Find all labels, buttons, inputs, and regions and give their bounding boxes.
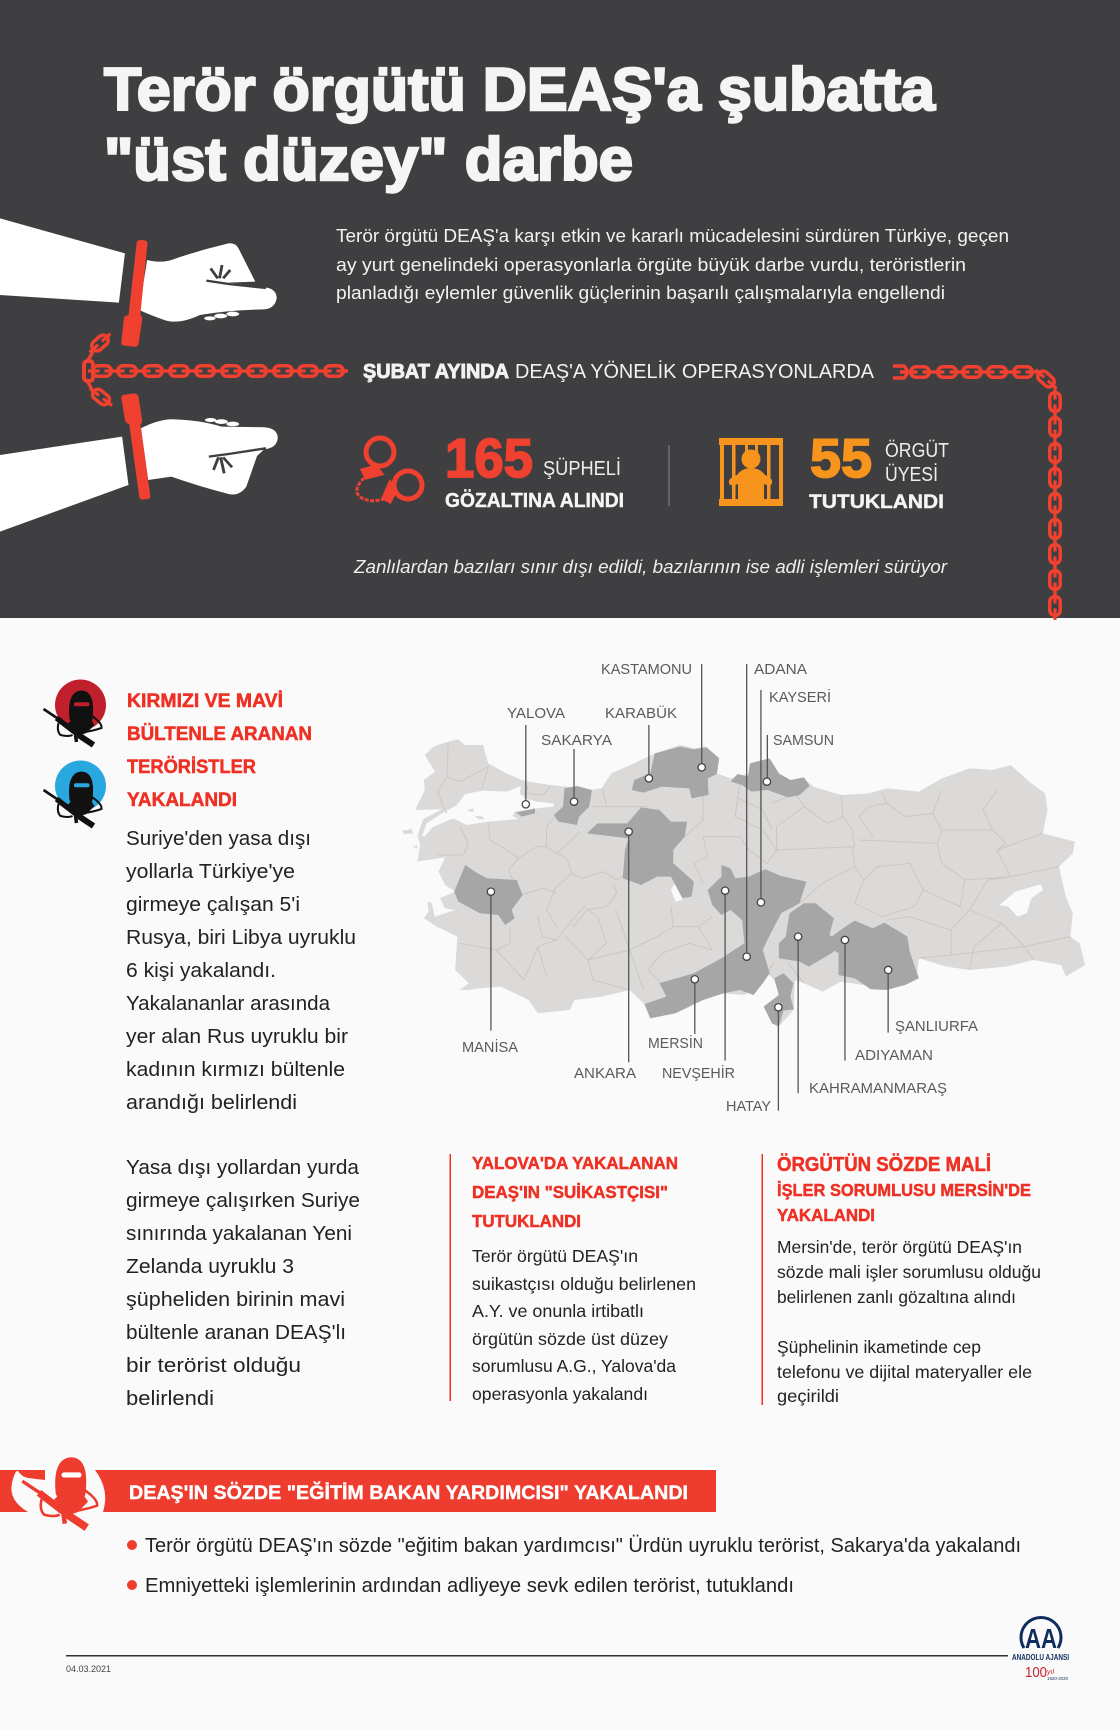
islands bbox=[402, 809, 484, 991]
map labels: SAMSUN bbox=[773, 732, 834, 749]
heading: red and blue notices bbox=[127, 691, 312, 811]
country base bbox=[415, 739, 1085, 1027]
banner bbox=[0, 1470, 716, 1512]
text block: Russian and Libyan suspects: 6 kişi yakalandı. bbox=[126, 960, 276, 982]
text block: Russian and Libyan suspects: yollarla Türkiye'ye bbox=[126, 861, 295, 883]
intro text: Terör örgütü DEAŞ'a karşı etkin ve kararlı mücadelesini sürdüren Türkiye, geçen bbox=[336, 225, 1009, 246]
map labels bbox=[462, 661, 978, 1115]
map labels: ŞANLIURFA bbox=[895, 1018, 978, 1035]
leader lines bbox=[491, 664, 888, 1111]
heading: red and blue notices: YAKALANDI bbox=[127, 790, 237, 811]
bullet list bbox=[127, 1535, 1021, 1597]
intro text bbox=[336, 225, 1009, 303]
text block: New Zealand suspects: bültenle aranan DEAŞ'lı bbox=[126, 1322, 346, 1344]
bullet one: Terör örgütü DEAŞ'ın sözde "eğitim bakan yardımcısı" Ürdün uyruklu terörist, Sakarya'da yakalandı bbox=[145, 1535, 1021, 1557]
text: Yalova: suikastçısı olduğu belirlenen bbox=[472, 1274, 696, 1294]
logo: Anadolu Ajansi bbox=[1012, 1617, 1069, 1681]
text: Mersin: geçirildi bbox=[777, 1386, 839, 1406]
text: Mersin: belirlenen zanlı gözaltına alındı bbox=[777, 1287, 1016, 1307]
lower arm and hand bbox=[0, 418, 278, 532]
text: Mersin: sözde mali işler sorumlusu olduğu bbox=[777, 1262, 1041, 1282]
heading: red and blue notices: BÜLTENLE ARANAN bbox=[127, 724, 312, 745]
text block: New Zealand suspects: şüpheliden birinin mavi bbox=[126, 1289, 345, 1311]
highlighted provinces bbox=[454, 747, 919, 1027]
province borders bbox=[438, 743, 1070, 990]
water cut-outs bbox=[422, 786, 1043, 917]
text block: Russian and Libyan suspects: Yakalananlar arasında bbox=[126, 993, 331, 1015]
map labels: KAYSERİ bbox=[769, 688, 831, 706]
heading: Yalova bbox=[472, 1153, 678, 1231]
icon: red terrorist bbox=[44, 680, 106, 745]
banner text: DEAŞ'IN SÖZDE "EĞİTİM BAKAN YARDIMCISI" YAKALANDI bbox=[129, 1482, 688, 1504]
map labels: KAHRAMANMARAŞ bbox=[809, 1080, 947, 1097]
logo: Anadolu Ajansi: 100 bbox=[1025, 1664, 1047, 1681]
map of Turkey bbox=[402, 664, 1085, 1111]
chain: left bbox=[84, 330, 348, 410]
stat: 55 arrested bbox=[809, 427, 949, 513]
text: Mersin: Mersin'de, terör örgütü DEAŞ'ın bbox=[777, 1237, 1022, 1257]
map labels: MANİSA bbox=[462, 1038, 518, 1056]
panel: Mersin bbox=[762, 1153, 1041, 1406]
map labels: YALOVA bbox=[507, 705, 565, 722]
heading: red and blue notices: KIRMIZI VE MAVİ bbox=[127, 691, 283, 712]
text block: New Zealand suspects: girmeye çalışırken Suriye bbox=[126, 1190, 360, 1212]
map labels: KASTAMONU bbox=[601, 661, 692, 678]
logo: Anadolu Ajansi: yıl bbox=[1046, 1669, 1054, 1676]
map labels: ADANA bbox=[754, 661, 807, 678]
title: "üst düzey" darbe bbox=[104, 126, 633, 193]
logo: Anadolu Ajansi: AA bbox=[1025, 1623, 1057, 1654]
stat: 55 arrested: 55 bbox=[810, 427, 872, 489]
text block: New Zealand suspects: sınırında yakalanan Yeni bbox=[126, 1223, 352, 1245]
italic note: Zanlılardan bazıları sınır dışı edildi, bazılarının ise adli işlemleri sürüyor bbox=[353, 557, 948, 577]
heading: Yalova: DEAŞ'IN "SUİKASTÇISI" bbox=[472, 1182, 668, 1202]
chain: right bbox=[893, 366, 1060, 620]
stat: 165 detained: GÖZALTINA ALINDI bbox=[445, 489, 624, 512]
text: Mersin bbox=[777, 1237, 1041, 1406]
text: Mersin: Şüphelinin ikametinde cep bbox=[777, 1337, 981, 1357]
section heading: operations bbox=[363, 360, 875, 383]
icon: handcuffs bbox=[357, 438, 422, 502]
bullet two: Emniyetteki işlemlerinin ardından adliyeye sevk edilen terörist, tutuklandı bbox=[145, 1575, 794, 1597]
text block: Russian and Libyan suspects: Rusya, biri Libya uyruklu bbox=[126, 927, 356, 949]
intro text: planladığı eylemler güvenlik güçlerinin başarılı çalışmalarıyla engellendi bbox=[336, 282, 945, 303]
text block: New Zealand suspects: Yasa dışı yollardan yurda bbox=[126, 1157, 360, 1179]
text block: New Zealand suspects: bir terörist olduğu bbox=[126, 1355, 301, 1377]
text block: New Zealand suspects bbox=[126, 1157, 360, 1410]
icon: blue terrorist bbox=[44, 760, 106, 826]
text block: Russian and Libyan suspects: kadının kırmızı bültenle bbox=[126, 1059, 345, 1081]
illustration: cuffed hands bbox=[0, 218, 278, 532]
logo: Anadolu Ajansi: ANADOLU AJANSI bbox=[1012, 1652, 1069, 1662]
intro text: ay yurt genelindeki operasyonlarla örgüte büyük darbe vurdu, teröristlerin bbox=[336, 254, 966, 275]
lower cuff bbox=[121, 393, 150, 500]
title bbox=[104, 56, 936, 193]
heading: Mersin bbox=[777, 1153, 1031, 1225]
text block: Russian and Libyan suspects: girmeye çalışan 5'i bbox=[126, 894, 300, 916]
text block: Russian and Libyan suspects: Suriye'den yasa dışı bbox=[126, 828, 311, 850]
section heading: operations: DEAŞ'A YÖNELİK OPERASYONLARDA bbox=[515, 360, 875, 383]
map labels: HATAY bbox=[726, 1098, 771, 1115]
title: Terör örgütü DEAŞ'a şubatta bbox=[104, 56, 936, 123]
upper cuff bbox=[121, 240, 147, 347]
text: Yalova: sorumlusu A.G., Yalova'da bbox=[472, 1356, 676, 1376]
text: Yalova: örgütün sözde üst düzey bbox=[472, 1329, 668, 1349]
location markers bbox=[487, 764, 892, 1011]
text block: New Zealand suspects: Zelanda uyruklu 3 bbox=[126, 1256, 294, 1278]
date: 04.03.2021 bbox=[66, 1664, 111, 1675]
heading: Yalova: TUTUKLANDI bbox=[472, 1211, 581, 1231]
text: Yalova: Terör örgütü DEAŞ'ın bbox=[472, 1246, 638, 1266]
map labels: NEVŞEHİR bbox=[662, 1064, 735, 1082]
stat: 165 detained: ŞÜPHELİ bbox=[543, 457, 621, 480]
panel: Yalova bbox=[450, 1153, 696, 1404]
stat: 165 detained bbox=[445, 427, 624, 512]
text block: New Zealand suspects: belirlendi bbox=[126, 1388, 214, 1410]
panel: dark header bbox=[0, 0, 1120, 618]
text: Yalova: A.Y. ve onunla irtibatlı bbox=[472, 1301, 644, 1321]
map labels: MERSİN bbox=[648, 1034, 703, 1052]
heading: red and blue notices: TERÖRİSTLER bbox=[127, 757, 256, 778]
stat: 55 arrested: ÜYESİ bbox=[885, 463, 938, 486]
text: Mersin: telefonu ve dijital materyaller ele bbox=[777, 1362, 1032, 1382]
map labels: ANKARA bbox=[574, 1065, 636, 1082]
map labels: SAKARYA bbox=[541, 732, 612, 749]
heading: Yalova: YALOVA'DA YAKALANAN bbox=[472, 1153, 678, 1173]
logo: Anadolu Ajansi: 1920-2020 bbox=[1047, 1676, 1068, 1681]
text block: Russian and Libyan suspects bbox=[126, 828, 356, 1114]
stat: 165 detained: 165 bbox=[445, 427, 533, 489]
heading: Mersin: İŞLER SORUMLUSU MERSİN'DE bbox=[777, 1180, 1031, 1200]
icon: prisoner behind bars bbox=[719, 438, 783, 506]
text: Yalova bbox=[472, 1246, 696, 1404]
section heading: operations: ŞUBAT AYINDA bbox=[363, 361, 509, 383]
stat: 55 arrested: ÖRGÜT bbox=[885, 440, 949, 462]
stat: 55 arrested: TUTUKLANDI bbox=[809, 492, 944, 513]
upper arm and hand bbox=[0, 218, 277, 322]
heading: Mersin: ÖRGÜTÜN SÖZDE MALİ bbox=[777, 1153, 991, 1176]
icon: red terrorist figure bbox=[22, 1457, 97, 1528]
text block: Russian and Libyan suspects: arandığı belirlendi bbox=[126, 1092, 297, 1114]
map labels: ADIYAMAN bbox=[855, 1047, 933, 1064]
map labels: KARABÜK bbox=[605, 704, 677, 722]
heading: Mersin: YAKALANDI bbox=[777, 1205, 875, 1225]
text: Yalova: operasyonla yakalandı bbox=[472, 1384, 648, 1404]
text block: Russian and Libyan suspects: yer alan Rus uyruklu bir bbox=[126, 1026, 348, 1048]
